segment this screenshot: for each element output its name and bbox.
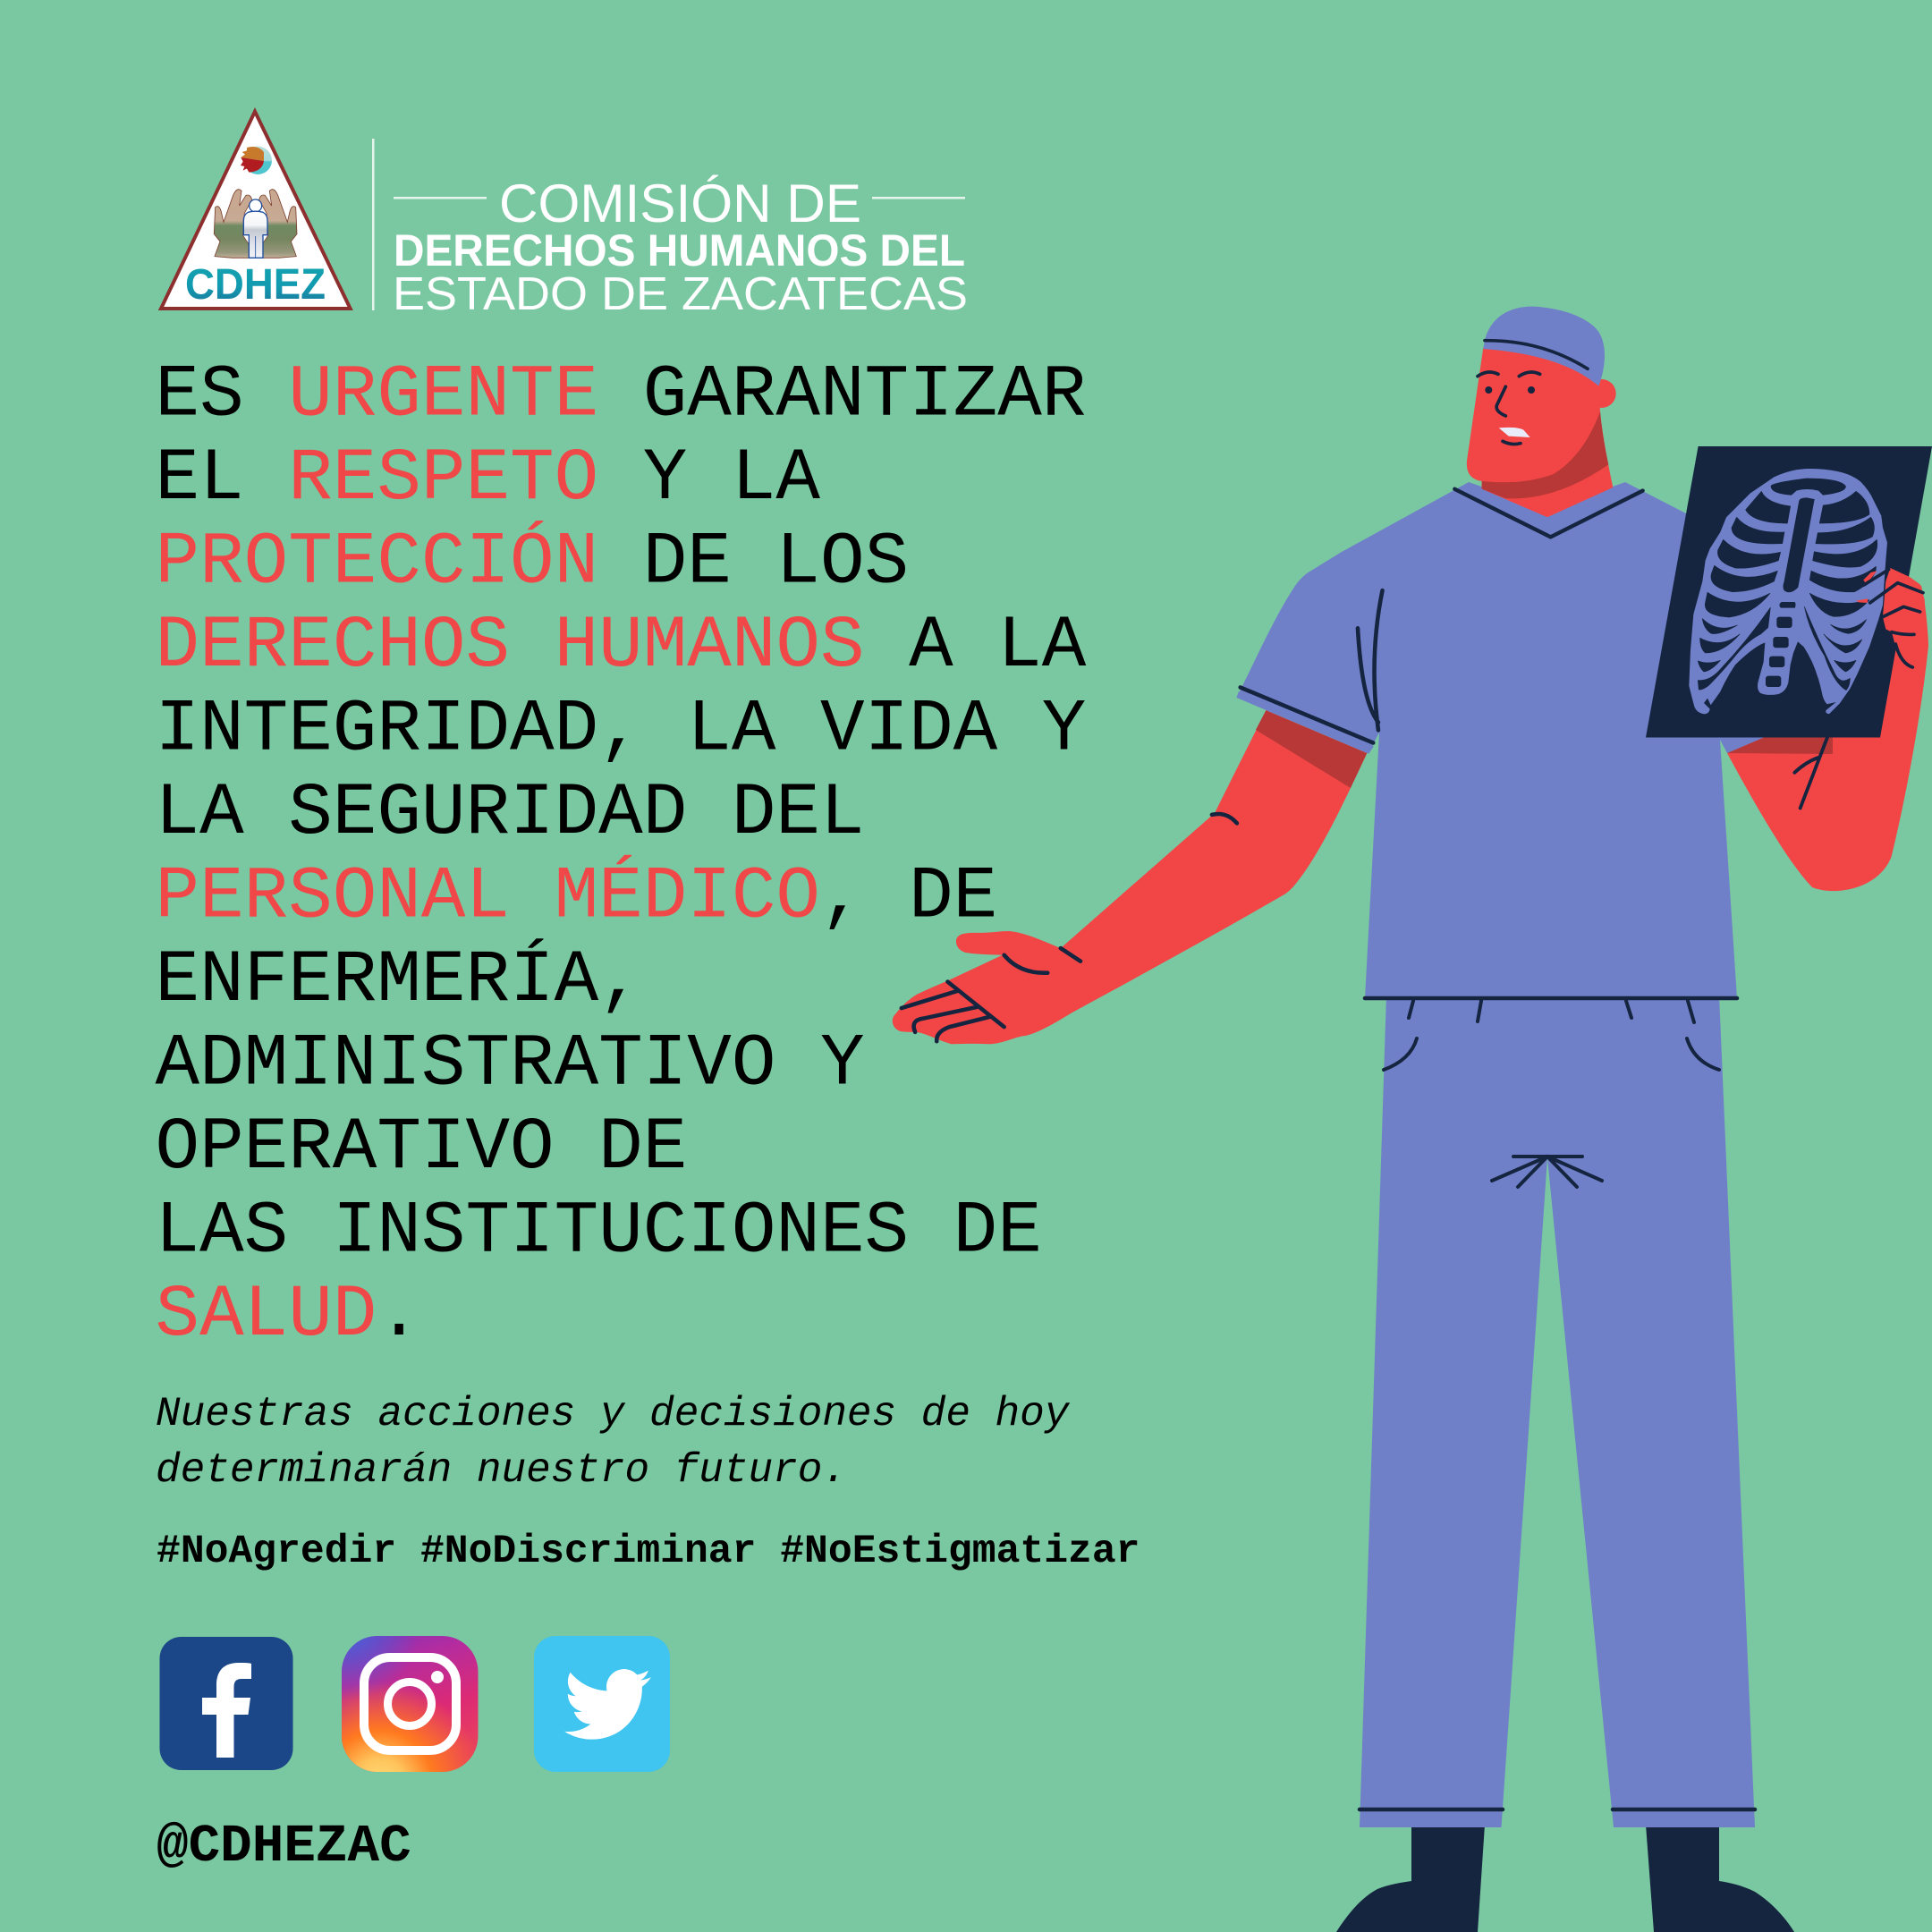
icon: instagram [342,1636,478,1772]
main statement: EL RESPETO Y LA [156,436,820,521]
main statement: ENFERMERÍA, [156,937,643,1022]
italic tagline [156,1391,1071,1494]
header: institution name [372,139,968,320]
face [1467,347,1600,482]
ribcage [1689,469,1887,714]
icon: person [243,199,267,258]
main statement: DERECHOS HUMANOS A LA [156,604,1087,688]
sleeve details [1237,590,1383,754]
main statement: LA SEGURIDAD DEL [156,771,865,855]
main statement: SALUD. [156,1273,421,1357]
icon: left hand [214,190,252,258]
social handle: @CDHEZAC [157,1817,411,1877]
hashtags: #NoAgredir #NoDiscriminar #NoEstigmatizar [157,1530,1140,1574]
logo: CDHEZ triangle [161,112,351,309]
neck and head [1467,307,1616,517]
main statement: LAS INSTITUCIONES DE [156,1190,1042,1274]
header: institution name: COMISIÓN DE [499,174,861,233]
collar line [1454,489,1643,537]
icon: facebook [159,1637,293,1770]
surgical cap [1483,307,1605,386]
shoes [1336,1825,1794,1932]
ear [1588,379,1616,408]
icon: twitter [534,1636,670,1772]
main statement: PERSONAL MÉDICO, DE [156,853,997,939]
hand fingers [1856,568,1928,667]
main statement: OPERATIVO DE [156,1106,687,1190]
main statement [156,352,1087,1357]
main statement: ADMINISTRATIVO Y [156,1021,865,1106]
main statement: INTEGRIDAD, LA VIDA Y [156,687,1086,771]
x-ray plate with ribcage [1646,446,1932,808]
icon: sun [241,147,272,174]
header: institution name: ESTADO DE ZACATECAS [393,268,968,320]
logo wordmark CDHEZ: CDHEZ [185,261,326,309]
pants [1360,995,1755,1827]
forearm lines [1794,737,1827,808]
italic tagline: determinarán nuestro futuro. [156,1447,847,1494]
neck [1482,411,1613,517]
ribcage gaps [1698,479,1877,691]
main statement: PROTECCIÓN DE LOS [156,519,909,605]
italic tagline: Nuestras acciones y decisiones de hoy [156,1391,1071,1437]
illustration: doctor holding x-ray [893,307,1932,1932]
shirt [1237,482,1765,998]
arm: open hand [893,710,1367,1044]
icon: right hand [259,190,297,258]
header: institution name: DERECHOS HUMANOS DEL [394,225,965,275]
arm: holding x-ray [1727,567,1928,891]
main statement: ES URGENTE GARANTIZAR [156,352,1086,436]
